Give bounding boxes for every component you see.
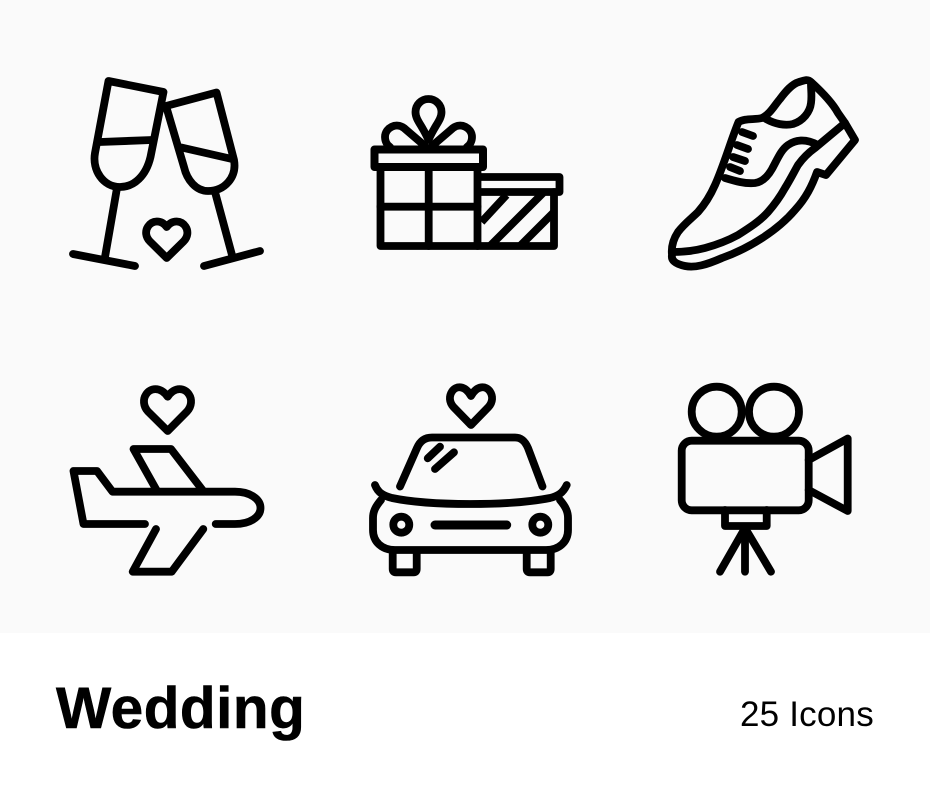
icon: gift boxes — [374, 99, 560, 246]
icon: airplane with heart — [74, 389, 260, 572]
icon: movie camera on tripod — [682, 387, 848, 572]
icon count label: 25 Icons — [740, 695, 874, 734]
icon: dress shoe — [672, 80, 855, 267]
icon: wedding car with heart — [373, 387, 568, 572]
title: Wedding — [56, 676, 305, 741]
icon: champagne glasses — [73, 81, 260, 266]
